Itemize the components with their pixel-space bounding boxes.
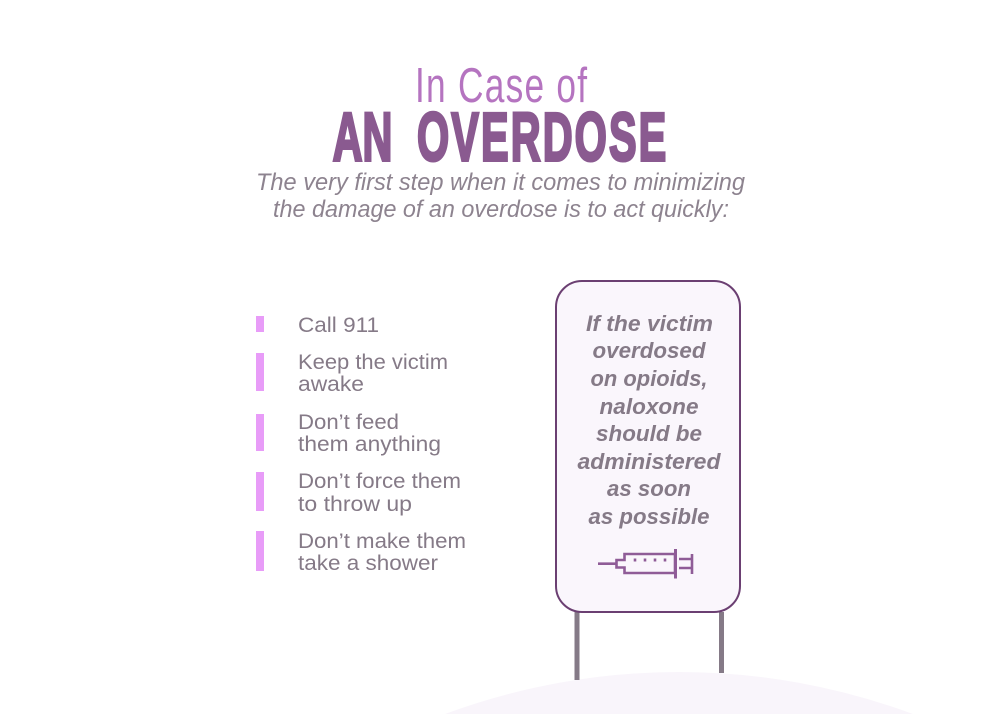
sign text: as soon: [607, 476, 691, 501]
item: don't force: [256, 470, 461, 516]
right sign post: [719, 612, 724, 673]
icon: syringe: [598, 549, 692, 578]
sign text: administered: [578, 449, 721, 474]
sign text: should be: [596, 421, 702, 446]
item: don't feed: Don’t feed: [298, 411, 399, 434]
sign text: on opioids,: [590, 366, 708, 391]
sign text: If the victim: [586, 311, 713, 336]
item: don't shower: take a shower: [298, 552, 438, 575]
title line 1: In Case of: [415, 58, 587, 113]
item: don't feed: them anything: [298, 433, 441, 456]
item: call 911: Call 911: [298, 314, 379, 337]
item: call 911: [256, 314, 379, 337]
item: don't shower: [256, 530, 466, 575]
item: don't force: to throw up: [298, 493, 412, 516]
hill: [445, 672, 913, 714]
checklist: [256, 314, 466, 575]
sign text: overdosed: [592, 338, 706, 363]
title line 2: OVERDOSE: [417, 99, 668, 176]
item: don't feed: [256, 411, 441, 456]
item: keep awake: Keep the victim: [298, 351, 448, 374]
title line 2: AN: [333, 99, 392, 176]
title: [333, 58, 668, 176]
sign board: [556, 281, 740, 612]
item: keep awake: awake: [298, 373, 364, 396]
item: keep awake: [256, 351, 448, 396]
sign text: naloxone: [600, 394, 698, 419]
sign text: as possible: [588, 504, 710, 529]
item: don't force: Don’t force them: [298, 470, 461, 493]
subtitle: the damage of an overdose is to act quickly:: [273, 196, 729, 223]
left sign post: [574, 612, 580, 680]
item: don't shower: Don’t make them: [298, 530, 466, 553]
sign text: [578, 311, 721, 529]
subtitle: The very first step when it comes to minimizing: [256, 169, 746, 196]
subtitle: [256, 169, 746, 223]
